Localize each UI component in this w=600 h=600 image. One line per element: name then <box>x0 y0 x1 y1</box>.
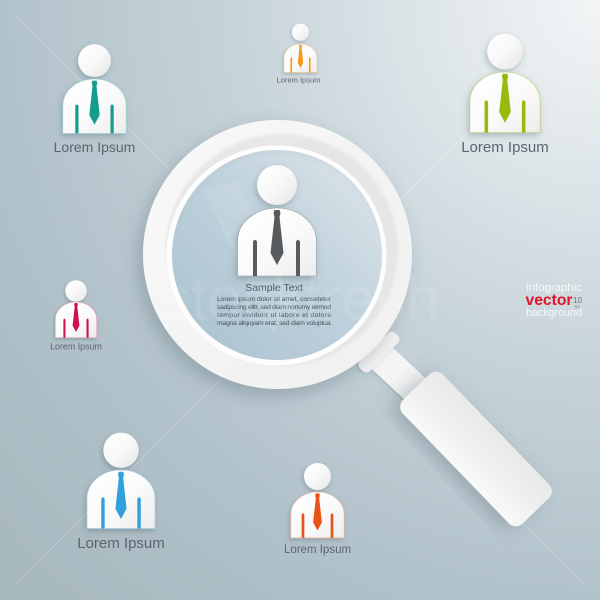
label: blue: Lorem Ipsum <box>77 535 165 552</box>
head <box>304 463 331 490</box>
tie <box>89 81 100 125</box>
logo number: 10 <box>573 296 582 305</box>
label: red-orange: Lorem Ipsum <box>284 544 351 556</box>
head <box>103 433 139 468</box>
lens heading: Sample Text <box>245 282 303 294</box>
head <box>78 44 111 77</box>
suspenders <box>485 100 525 133</box>
tie <box>499 74 511 123</box>
suspenders <box>290 57 311 73</box>
person: blue, bottom left <box>87 433 155 528</box>
logo line: vector: vector <box>526 292 572 309</box>
lens text block: sadipscing elitr, sed diam nonumy eirmod <box>217 304 331 311</box>
suspenders <box>253 240 300 276</box>
suspenders <box>302 513 333 538</box>
tie <box>298 45 303 68</box>
head <box>292 24 309 41</box>
logo line: infographic: infographic <box>526 282 583 294</box>
tie <box>270 210 284 265</box>
tie <box>73 303 79 332</box>
head <box>65 280 87 302</box>
person: grey, in lens <box>238 165 316 276</box>
label: green: Lorem Ipsum <box>461 139 549 156</box>
handle grip <box>396 368 556 530</box>
person: teal, top left <box>63 44 126 133</box>
lens text block: magna aliquyam erat, sed diam voluptua. <box>217 320 332 327</box>
suspenders <box>63 319 89 338</box>
lens text block: tempor invidunt ut labore et dolore <box>217 312 331 319</box>
handle collar <box>356 329 402 375</box>
person: red-orange, bottom centre <box>291 463 344 538</box>
lens text block: Lorem ipsum dolor sit amet, consetetur <box>217 296 332 303</box>
suspenders <box>75 104 114 133</box>
label: orange: Lorem Ipsum <box>277 76 320 84</box>
logo line: background: background <box>526 307 582 319</box>
logo small eps: eps <box>574 304 580 308</box>
label: crimson: Lorem Ipsum <box>50 342 102 352</box>
tie <box>313 493 322 530</box>
lens <box>172 150 382 360</box>
ring inner shade <box>166 134 398 366</box>
watermark: stockfresh <box>160 265 440 334</box>
head <box>257 165 297 205</box>
torso <box>63 79 126 133</box>
lens top shade <box>172 143 382 333</box>
torso <box>291 492 344 538</box>
lens text block <box>217 296 332 327</box>
head <box>487 34 523 69</box>
inner rim <box>166 146 386 366</box>
torso <box>470 72 540 133</box>
person: green, top right <box>470 34 540 133</box>
logo: infographic vector background <box>526 282 583 319</box>
handle neck <box>364 340 432 406</box>
light beam <box>203 181 300 333</box>
outer ring <box>143 120 412 389</box>
person: orange, top centre <box>284 24 317 73</box>
torso <box>238 208 316 276</box>
torso <box>284 44 317 73</box>
suspenders <box>101 497 141 528</box>
torso <box>87 470 155 528</box>
tie <box>115 472 127 519</box>
person: crimson, left <box>55 280 97 338</box>
magnifying glass <box>143 120 556 530</box>
label: teal: Lorem Ipsum <box>54 139 135 155</box>
torso <box>55 302 97 338</box>
